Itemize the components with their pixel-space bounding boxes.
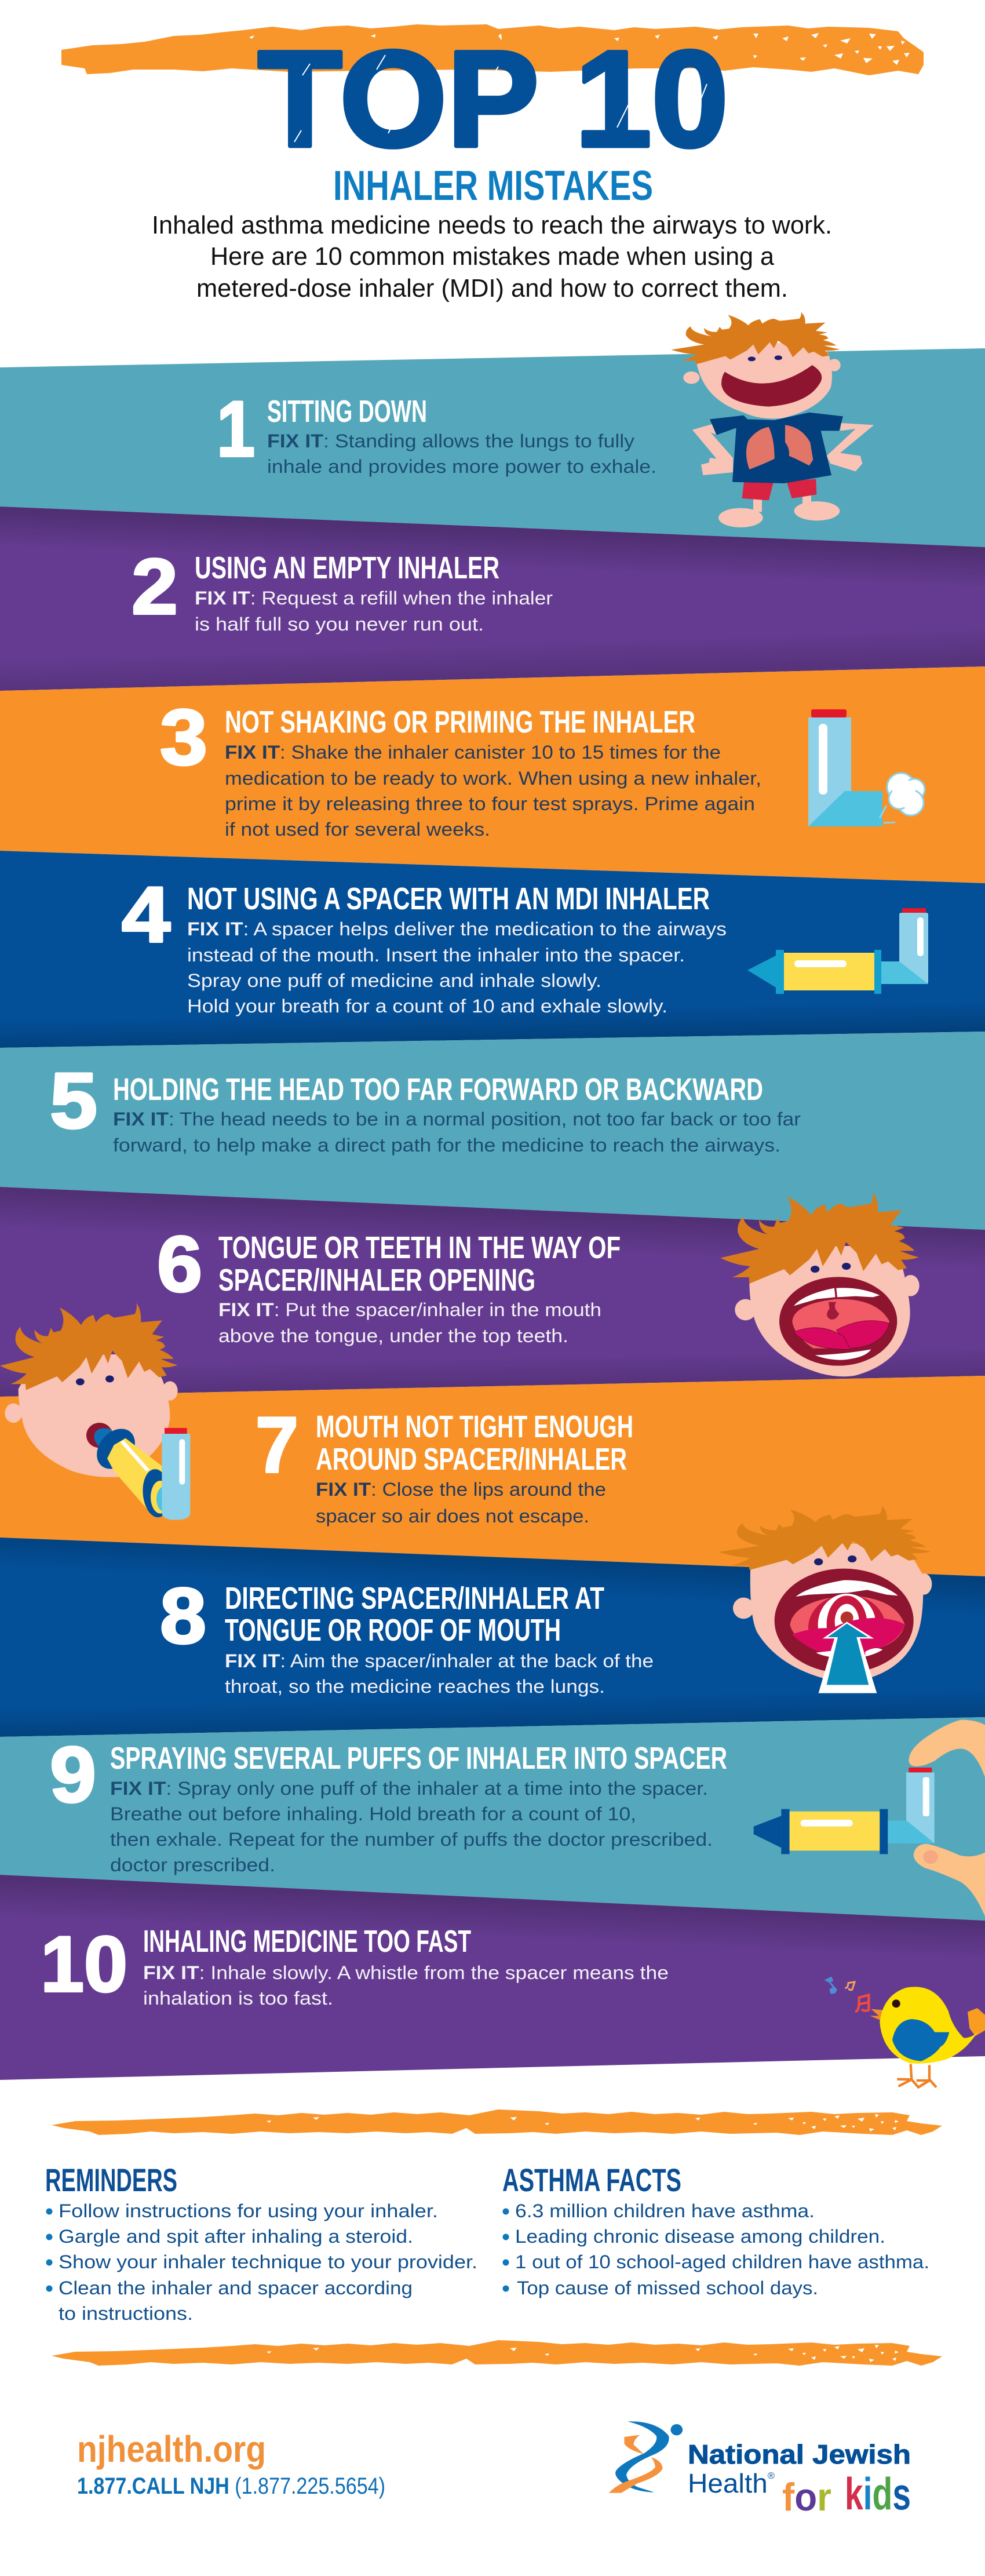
asthma facts items: 6.3 million children have asthma.	[515, 2200, 815, 2221]
logo wordmark: National Jewish	[688, 2439, 911, 2469]
number 6: 6	[157, 1220, 202, 1308]
number 9: 9	[50, 1730, 96, 1819]
fix it 8: throat, so the medicine reaches the lungs.	[225, 1676, 605, 1697]
reminders heading: REMINDERS	[45, 2162, 177, 2198]
fix it 1	[267, 431, 656, 477]
number 2: 2	[132, 542, 178, 631]
heading 8: DIRECTING SPACER/INHALER AT	[225, 1581, 604, 1616]
icon: smiling boy with lungs	[671, 312, 874, 527]
number 1: 1	[217, 385, 255, 473]
fix it 2	[195, 588, 553, 635]
icon: inhaler with spacer	[747, 908, 928, 994]
fix it 3: medication to be ready to work. When using a new inhaler,	[225, 768, 761, 789]
intro text: Inhaled asthma medicine needs to reach the airways to work.	[152, 211, 832, 239]
heading 6: SPACER/INHALER OPENING	[218, 1263, 535, 1298]
fix it 3	[225, 742, 761, 840]
fix it 9: Breathe out before inhaling. Hold breath for a count of 10,	[110, 1803, 636, 1824]
panel: mistake 5 head position	[0, 1032, 985, 1230]
phone number: 1.877.CALL NJH (1.877.225.5654)	[77, 2473, 385, 2499]
panel: mistake 1 sitting down	[0, 312, 985, 547]
fix it 4: Hold your breath for a count of 10 and exhale slowly.	[187, 996, 667, 1016]
logo for kids: kids	[845, 2468, 911, 2519]
logo: National Jewish Health for Kids	[609, 2421, 911, 2519]
fix it 3: if not used for several weeks.	[225, 819, 490, 840]
fix it 4: FIX IT : A spacer helps deliver the medication to the airways	[187, 919, 727, 939]
heading 8	[225, 1581, 604, 1648]
fix it 6	[218, 1299, 601, 1346]
reminders items: Clean the inhaler and spacer according	[59, 2278, 413, 2298]
fix it 8: FIX IT : Aim the spacer/inhaler at the back of the	[225, 1650, 654, 1671]
number 5: 5	[50, 1056, 97, 1145]
number 8: 8	[160, 1572, 206, 1660]
fix it 9: FIX IT : Spray only one puff of the inhaler at a time into the spacer.	[110, 1778, 708, 1799]
fix it 1: inhale and provides more power to exhale.	[267, 456, 656, 477]
fix it 4: instead of the mouth. Insert the inhaler into the spacer.	[187, 945, 685, 965]
logo for kids	[782, 2468, 911, 2519]
fix it 2: FIX IT : Request a refill when the inhaler	[195, 588, 553, 609]
panel: mistake 4 no spacer	[0, 851, 985, 1048]
fix it 10: inhalation is too fast.	[143, 1988, 333, 2009]
asthma facts items: 1 out of 10 school-aged children have asthma.	[515, 2251, 929, 2272]
fix it 7	[316, 1479, 606, 1526]
fix it 9: then exhale. Repeat for the number of puffs the doctor prescribed.	[110, 1829, 713, 1850]
intro text	[152, 211, 832, 303]
intro text: Here are 10 common mistakes made when using a	[210, 242, 775, 271]
panel: mistake 3 shaking or priming	[0, 666, 985, 883]
number 7: 7	[256, 1401, 298, 1489]
reminders items: Gargle and spit after inhaling a steroid.	[59, 2226, 413, 2247]
fix it 7: FIX IT: Close the lips around the	[316, 1479, 606, 1500]
fix it 1: FIX IT : Standing allows the lungs to fully	[267, 431, 634, 451]
heading 8: TONGUE OR ROOF OF MOUTH	[225, 1613, 561, 1648]
logo for kids: for	[782, 2475, 831, 2519]
number 3: 3	[160, 693, 207, 781]
fix it 10	[143, 1962, 669, 2009]
heading 6	[218, 1230, 621, 1298]
heading 3: NOT SHAKING OR PRIMING THE INHALER	[225, 705, 695, 739]
website: njhealth.org	[77, 2428, 266, 2470]
fix it 9	[110, 1778, 713, 1875]
panel: mistake 9 several puffs	[0, 1717, 985, 1921]
reminders items: Follow instructions for using your inhaler.	[59, 2200, 438, 2221]
fix it 8	[225, 1650, 654, 1697]
title: TOP 10: TOP 10	[258, 23, 728, 176]
panel: mistake 7 mouth not tight	[0, 1303, 985, 1576]
orange divider brush lower	[52, 2340, 942, 2366]
logo wordmark second line: ®	[768, 2471, 775, 2481]
icon: inhaler with spray cloud	[808, 709, 925, 826]
reminders items: to instructions.	[59, 2303, 193, 2324]
heading 5: HOLDING THE HEAD TOO FAR FORWARD OR BACKWARD	[113, 1072, 763, 1107]
icon: hand pressing inhaler with spacer	[754, 1719, 985, 1916]
asthma facts items: Leading chronic disease among children.	[515, 2226, 885, 2247]
reminders list	[45, 2162, 477, 2324]
heading 9: SPRAYING SEVERAL PUFFS OF INHALER INTO SPACER	[110, 1741, 727, 1776]
reminders items	[46, 2200, 477, 2324]
heading 2: USING AN EMPTY INHALER	[195, 551, 499, 585]
icon: face using inhaler with spacer	[0, 1303, 190, 1520]
intro text: metered-dose inhaler (MDI) and how to correct them.	[196, 274, 788, 303]
fix it 4: Spray one puff of medicine and inhale slowly.	[187, 970, 601, 991]
top orange brush stroke	[61, 24, 924, 75]
orange divider brush upper	[52, 2109, 942, 2135]
heading 4: NOT USING A SPACER WITH AN MDI INHALER	[187, 881, 710, 916]
asthma facts items: Top cause of missed school days.	[517, 2278, 818, 2298]
icon: singing bird	[825, 1977, 985, 2087]
panel: mistake 8 directing at tongue	[0, 1506, 985, 1737]
asthma facts items	[503, 2200, 929, 2298]
logo mark	[609, 2421, 683, 2493]
subtitle: inhaler mistakes: INHALER MISTAKES	[333, 163, 653, 209]
heading 6: TONGUE OR TEETH IN THE WAY OF	[218, 1230, 621, 1265]
heading 7: MOUTH NOT TIGHT ENOUGH	[316, 1409, 633, 1444]
icon: open mouth face	[720, 1192, 920, 1376]
fix it 3: prime it by releasing three to four test sprays. Prime again	[225, 793, 755, 814]
heading 7: AROUND SPACER/INHALER	[316, 1442, 627, 1477]
fix it 7: spacer so air does not escape.	[316, 1506, 589, 1526]
fix it 6: FIX IT : Put the spacer/inhaler in the mouth	[218, 1299, 601, 1320]
icon: mouth target with arrow	[718, 1506, 932, 1693]
logo wordmark second line: Health	[688, 2468, 765, 2498]
fix it 10: FIX IT : Inhale slowly. A whistle from the spacer means the	[143, 1962, 669, 1983]
heading 10: INHALING MEDICINE TOO FAST	[143, 1924, 471, 1959]
asthma facts heading: ASTHMA FACTS	[502, 2162, 681, 2198]
number 10: 10	[41, 1920, 127, 2008]
fix it 5	[113, 1109, 801, 1156]
panel: mistake 2 empty inhaler	[0, 507, 985, 691]
fix it 5: forward, to help make a direct path for the medicine to reach the airways.	[113, 1135, 780, 1156]
fix it 3: FIX IT: Shake the inhaler canister 10 to 15 times for the	[225, 742, 721, 763]
fix it 4	[187, 919, 727, 1016]
fix it 2: is half full so you never run out.	[195, 614, 484, 635]
asthma facts list	[502, 2162, 929, 2298]
heading 7	[316, 1409, 633, 1477]
fix it 6: above the tongue, under the top teeth.	[218, 1325, 568, 1346]
fix it 5: FIX IT : The head needs to be in a normal position, not too far back or too far	[113, 1109, 801, 1129]
heading 1: SITTING DOWN	[267, 394, 427, 429]
panel: mistake 10 inhaling too fast	[0, 1875, 985, 2087]
fix it 9: doctor prescribed.	[110, 1854, 275, 1875]
reminders items: Show your inhaler technique to your provider.	[59, 2251, 477, 2272]
panel: mistake 6 tongue or teeth	[0, 1187, 985, 1397]
number 4: 4	[122, 870, 170, 959]
